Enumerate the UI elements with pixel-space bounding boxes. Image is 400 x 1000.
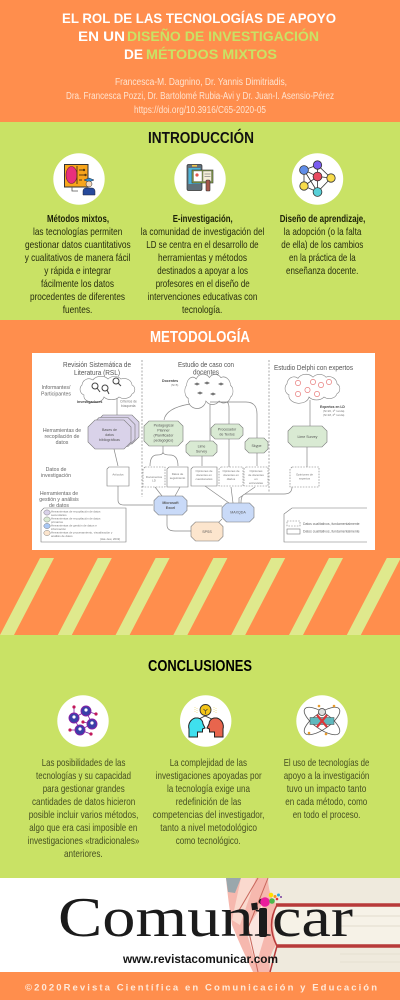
row labels: Participantes <box>41 392 71 398</box>
text block: conclusion 1: investigaciones «tradicionales» <box>28 835 140 847</box>
text block: métodos mixtos: procedentes de diferentes <box>30 291 125 303</box>
logo: comunicar: Comunicar <box>58 887 353 949</box>
column titles: docentes <box>193 368 219 376</box>
text block: diseño de aprendizaje: la adopción (o la falta <box>284 226 362 238</box>
chart: research design diagram <box>32 353 375 550</box>
text block: métodos mixtos <box>25 213 131 316</box>
documents: research data: docentes en <box>223 473 239 477</box>
cloud: researchers: búsqueda <box>121 404 136 408</box>
text block: conclusion 1: posible incluir varios métodos, <box>29 809 138 821</box>
documents: research data: Opiniones <box>249 469 263 473</box>
legend: tool types: secundarios <box>51 513 67 517</box>
cloud: experts: (N=18, 2ª ronda) <box>323 413 344 417</box>
tools: data collection octagons <box>88 415 327 456</box>
documents: research data: Opiniones de <box>195 469 213 473</box>
legend: tool types: (Hai-Jew, 2019) <box>100 537 120 541</box>
text block: conclusion 3: en cada método, como <box>285 796 367 808</box>
text block: conclusion 1: algo que era casi imposible en <box>29 822 137 834</box>
documents: research data: expertos <box>299 476 311 480</box>
tools: data collection octagons: Pedagogical <box>154 424 174 428</box>
documents: research data: Documentos <box>146 475 163 479</box>
documents: research data: Opiniones de <box>296 472 313 476</box>
icon: two heads and lightbulb <box>180 695 231 747</box>
copyright text: ©2020Revista Científica en Comunicación y Educación <box>25 982 377 994</box>
text block: conclusion 2 <box>153 757 264 847</box>
legend: tool types <box>41 508 126 542</box>
documents: research data: entrevistas <box>249 481 264 485</box>
text block: conclusion 2: La complejidad de las <box>170 757 247 769</box>
panel: conclusiones <box>0 635 400 878</box>
documents: research data: Artículos <box>112 472 124 476</box>
tools: data collection octagons: Survey <box>196 450 207 454</box>
cloud: teachers <box>162 374 233 408</box>
text block: e-investigación: LD se centra en el desarrollo de <box>146 239 259 251</box>
title <box>62 10 336 62</box>
text block: conclusion 2: la tecnología exige una <box>167 783 250 795</box>
text block: conclusion 2: redefinición de las <box>176 796 241 808</box>
row labels: de datos <box>49 503 69 509</box>
text block: conclusion 1: Las posibilidades de las <box>42 757 125 769</box>
text block: conclusion 1: tecnologías y su capacidad <box>36 770 131 782</box>
authors and doi: Francesca-M. Dagnino, Dr. Yannis Dimitriadis, <box>115 77 287 88</box>
tools: analysis octagons: MAXQDA <box>230 510 246 514</box>
text block: e-investigación: intervenciones educativas con <box>148 291 258 303</box>
cloud: researchers: Criterios de <box>120 400 137 404</box>
heading: conclusiones: CONCLUSIONES <box>148 658 252 675</box>
image: stacked books <box>226 878 400 972</box>
legend: tool types: Herramientas de recopilación de datos <box>51 516 101 520</box>
documents: research data: en <box>254 477 258 481</box>
title: DE <box>124 46 143 62</box>
tools: data collection octagons: pedagógico) <box>154 438 173 442</box>
text block: conclusion 1 <box>28 757 140 860</box>
text block: diseño de aprendizaje: enseñanza docente. <box>286 265 358 277</box>
cloud: teachers: Docentes <box>162 379 178 383</box>
text block: e-investigación: herramientas y métodos <box>158 252 247 264</box>
journal url: www.revistacomunicar.com <box>122 952 278 966</box>
cloud: experts <box>285 374 345 417</box>
authors and doi: Dra. Francesca Pozzi, Dr. Bartolomé Rubia-Avi y Dr. Juan-I. Asensio-Pérez <box>66 91 334 102</box>
legend: tool types: Herramientas de recopilación de datos <box>51 510 101 514</box>
text block: métodos mixtos: las tecnologías permiten <box>33 226 122 238</box>
text block: diseño de aprendizaje: Diseño de aprendizaje, <box>280 213 365 225</box>
text block: e-investigación: destinados a apoyar a los <box>157 265 248 277</box>
icon: connected people <box>57 695 109 747</box>
documents: research data: Datos de <box>172 472 184 476</box>
row labels: Informantes/ <box>42 385 71 391</box>
text block: métodos mixtos: fuentes. <box>63 304 92 316</box>
row labels: recopilación de <box>45 434 80 440</box>
text block: conclusion 1: cantidades de datos hicieron <box>32 796 135 808</box>
tools: data collection octagons: Lime Survey <box>298 435 318 439</box>
column titles: Revisión Sistemática de <box>63 360 131 369</box>
panel: metodología <box>0 320 400 635</box>
legend: tool types: Herramientas de gestión de datos e <box>51 524 97 528</box>
row labels: Herramientas de <box>40 491 78 497</box>
column titles: Estudio de caso con <box>178 360 234 369</box>
documents: research data: diarios <box>227 477 236 481</box>
text block: e-investigación: profesores en el diseño de <box>156 278 250 290</box>
text block: métodos mixtos: y cualitativos de manera fácil <box>25 252 130 264</box>
title: EL ROL DE LAS TECNOLOGÍAS DE APOYO <box>62 10 336 26</box>
text block: conclusion 2: investigaciones apoyadas por <box>156 770 262 782</box>
tools: analysis octagons: Microsoft <box>162 501 179 505</box>
cloud: experts: (N=20, 1ª ronda) <box>323 409 344 413</box>
text block: conclusion 2: tanto a nivel metodológico <box>160 822 257 834</box>
text block: métodos mixtos: fácilmente los datos <box>41 278 114 290</box>
documents: research data: LD <box>152 478 156 482</box>
icon: tablet and book <box>174 153 226 205</box>
text block: conclusion 2: como tecnológico. <box>176 835 241 847</box>
cloud: researchers: Investigadores <box>77 400 102 404</box>
heading: metodología: METODOLOGÍA <box>150 329 250 346</box>
tools: data collection octagons: Planner <box>157 428 170 432</box>
tools: data collection octagons: Lime <box>198 444 205 448</box>
text block: conclusion 3: en todo el proceso. <box>293 809 360 821</box>
text block: conclusion 3 <box>284 757 370 821</box>
legend: data types: Datos cualitativos, fundamentalmente <box>303 530 360 534</box>
title: MÉTODOS MIXTOS <box>146 46 277 62</box>
text block: diseño de aprendizaje: de ella) de los cambios <box>281 239 363 251</box>
column titles: Literatura (RSL) <box>74 368 120 377</box>
row labels: investigación <box>41 473 71 479</box>
text block: conclusion 3: tuvo un impacto tanto <box>287 783 367 795</box>
row labels: datos <box>56 440 69 446</box>
arrows <box>114 398 310 531</box>
text block: conclusion 3: El uso de tecnologías de <box>284 757 370 769</box>
title: EN UN <box>78 28 125 44</box>
tools: analysis octagons: Excel <box>166 506 175 510</box>
legend: data types: Datos cualitativos, fundamentalmente <box>303 522 360 526</box>
icon: network of nodes <box>292 153 343 205</box>
panel: copyright bar <box>0 972 400 1000</box>
panel: header <box>0 0 400 122</box>
panel: introducción <box>0 122 400 320</box>
text block: métodos mixtos: gestionar datos cuantitativos <box>25 239 131 251</box>
heading: introducción: INTRODUCCIÓN <box>148 129 254 147</box>
text block: métodos mixtos: Métodos mixtos, <box>47 213 109 225</box>
text block: conclusion 2: competencias del investigador, <box>153 809 264 821</box>
row labels: Datos de <box>46 467 66 473</box>
documents: research data: Opiniones de <box>222 469 240 473</box>
text block: e-investigación: E-investigación, <box>173 213 233 225</box>
row labels: Herramientas de <box>43 428 81 434</box>
documents: research data: de docentes <box>248 473 264 477</box>
tools: data collection octagons: Bases de <box>102 428 117 432</box>
documents: research data <box>107 467 319 487</box>
text block: e-investigación: la comunidad de investigación del <box>141 226 264 238</box>
tools: data collection octagons: (Planificador <box>154 434 174 438</box>
tools: data collection octagons: datos <box>105 433 114 437</box>
documents: research data: seguimiento <box>170 476 186 480</box>
documents: research data: cuestionarios <box>195 477 213 481</box>
authors and doi: https://doi.org/10.3916/C65-2020-05 <box>134 105 266 116</box>
legend: tool types: análisis de datos <box>51 534 73 538</box>
text block: e-investigación <box>141 213 264 316</box>
text block: diseño de aprendizaje: en la práctica de la <box>289 252 356 264</box>
text block: conclusion 1: anteriores. <box>64 848 103 860</box>
authors and doi <box>66 77 334 116</box>
legend: tool types: primarios <box>51 520 63 524</box>
icon: brain and graduate <box>53 153 105 205</box>
legend: tool types: Herramientas de procesamiento, visualización y <box>51 530 113 534</box>
text block: métodos mixtos: y rápida e integrar <box>44 265 111 277</box>
text block: conclusion 3: apoyo a la investigación <box>284 770 370 782</box>
tools: analysis octagons <box>154 496 254 541</box>
title: DISEÑO DE INVESTIGACIÓN <box>127 27 319 44</box>
text block: e-investigación: tecnología. <box>182 304 222 316</box>
legend: data types <box>284 508 367 542</box>
icon: atom with tools <box>296 695 348 747</box>
text block: diseño de aprendizaje <box>280 213 365 277</box>
cloud: experts: Expertos en LD <box>320 405 345 409</box>
column titles: Estudio Delphi con expertos <box>274 363 353 372</box>
row labels: gestión y análisis <box>39 497 79 503</box>
cloud: researchers <box>77 376 137 408</box>
row labels <box>39 385 81 509</box>
tools: data collection octagons: Procesador <box>218 428 237 432</box>
tools: data collection octagons: de Textos <box>219 432 235 436</box>
column titles <box>63 360 353 377</box>
tools: analysis octagons: SPSS <box>202 530 212 534</box>
tools: data collection octagons: bibliográficas <box>99 438 120 442</box>
panel: journal footer <box>0 878 400 972</box>
cloud: teachers: (N=5) <box>171 383 178 387</box>
tools: data collection octagons: Skype <box>252 444 262 448</box>
documents: research data: docentes en <box>196 473 212 477</box>
text block: conclusion 1: para gestionar grandes <box>43 783 125 795</box>
legend: tool types: información <box>51 527 66 531</box>
